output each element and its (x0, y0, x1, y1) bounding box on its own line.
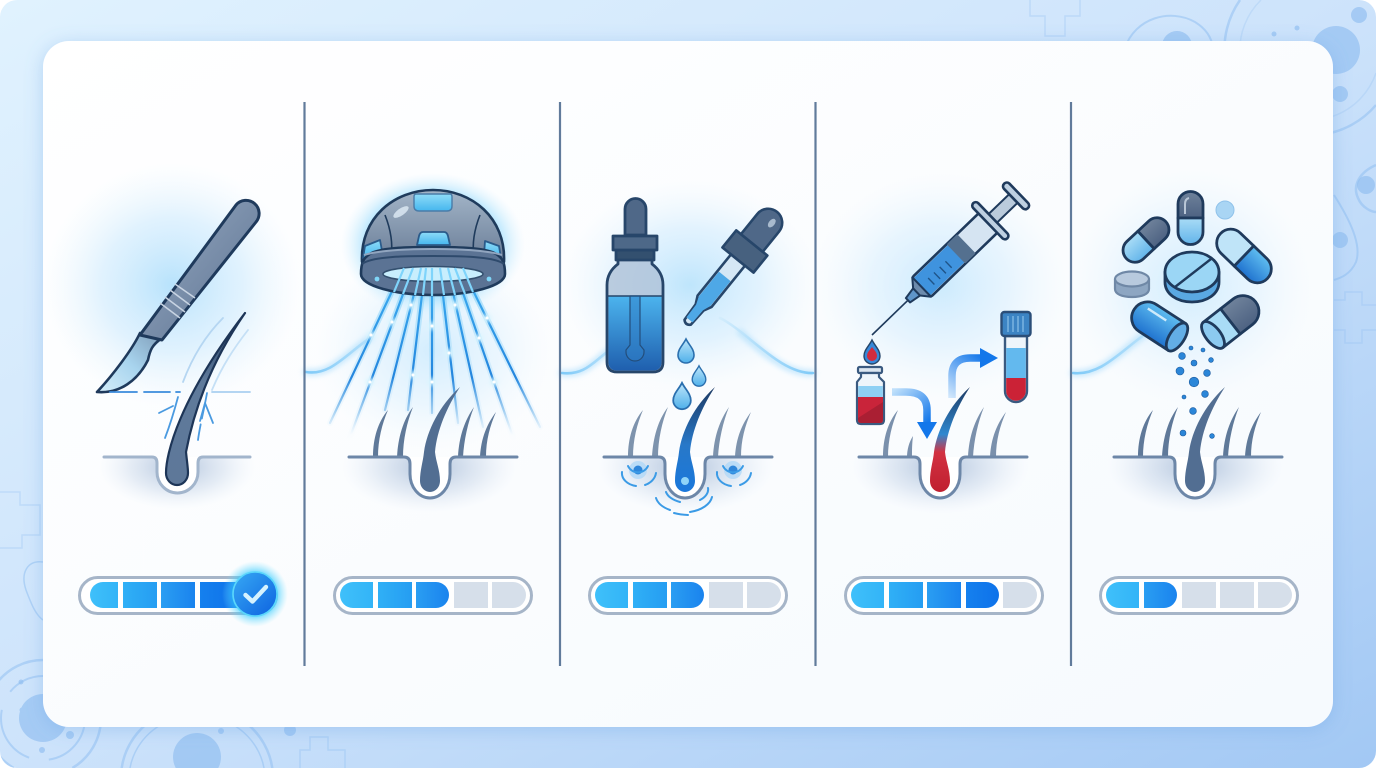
powder particles (1176, 346, 1214, 438)
follicle and hairs (604, 387, 772, 498)
progress bar (334, 578, 532, 614)
icon: light rays (330, 270, 540, 437)
progress bar (846, 578, 1042, 614)
capsule: upright (1178, 192, 1203, 244)
icon: test tube (1002, 312, 1030, 402)
follicle and hairs (349, 387, 517, 498)
check badge (222, 561, 288, 627)
panel: surgical treatment (80, 200, 288, 627)
arrow: follicle to tube (952, 348, 998, 398)
icon: scalpel (97, 200, 259, 392)
capsule: tilted left (1118, 213, 1174, 267)
arrow: vial to follicle (892, 392, 937, 439)
open capsule: blue (1126, 296, 1192, 355)
progress bar (1100, 578, 1298, 614)
panel: oral medication (1100, 192, 1298, 614)
icon: blood drop (864, 340, 880, 364)
icon: blood vial (857, 367, 884, 424)
icon: laser cap (361, 190, 505, 295)
skin shadows (114, 458, 1266, 504)
icon: falling drops (673, 339, 706, 409)
light dots (366, 301, 498, 386)
icon: syringe (855, 176, 1036, 353)
follicle and hairs (859, 0, 1027, 498)
capsule: tilted right (1211, 223, 1277, 289)
progress bar (590, 578, 786, 614)
panel: laser helmet (330, 190, 540, 614)
incision marks (110, 318, 250, 440)
icon: bubble (1216, 201, 1234, 219)
tablet (1165, 252, 1219, 302)
small disc (1115, 272, 1149, 297)
progress bar (80, 561, 288, 627)
icon: serum bottle (607, 198, 663, 372)
hair (166, 313, 245, 485)
panel: PRP injection (846, 0, 1042, 614)
ripple effects (622, 461, 751, 515)
column dividers (304, 102, 1071, 666)
follicle and hairs (1114, 387, 1282, 498)
icon: dropper (671, 199, 793, 336)
open capsule: grey (1197, 289, 1265, 352)
panel: serum (590, 198, 793, 614)
follicle skin (104, 457, 250, 493)
blue halos behind icons (44, 163, 1312, 450)
rays over the rim (394, 268, 473, 296)
icon: pills (1115, 192, 1277, 355)
connecting wave (306, 318, 1144, 373)
